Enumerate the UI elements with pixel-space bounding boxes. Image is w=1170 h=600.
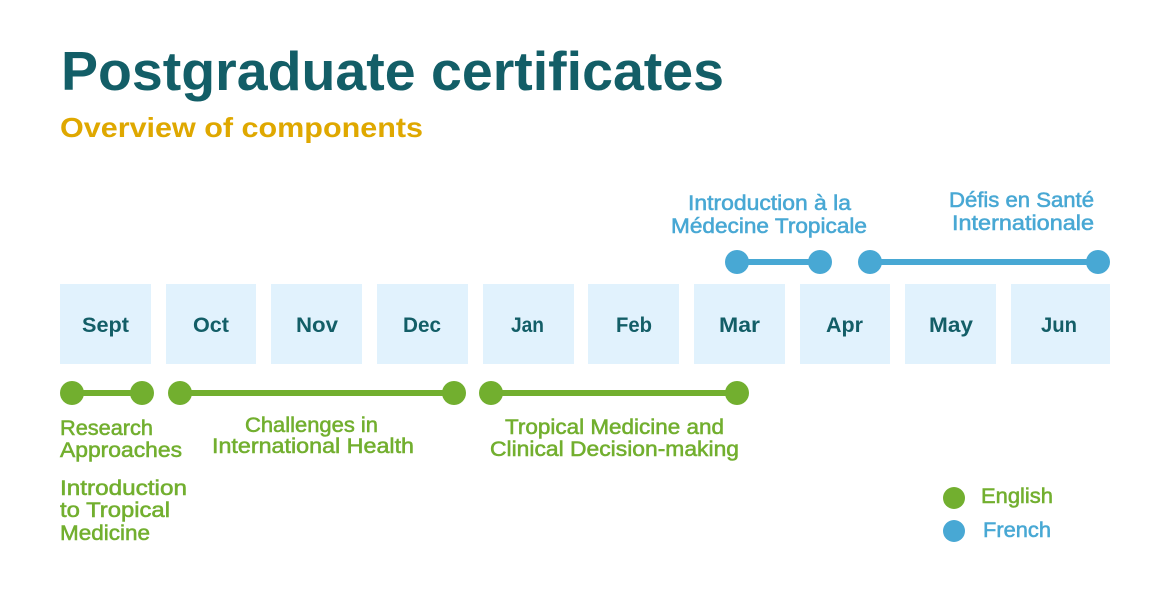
French course: Introduction à la Médecine Tropicale: Médecine Tropicale: [671, 215, 867, 238]
legend item: English: English: [981, 485, 1053, 508]
French course: Introduction à la Médecine Tropicale: Introduction à la: [688, 192, 851, 215]
English course: Challenges in International Health: [168, 381, 466, 458]
month: Dec: [377, 284, 468, 364]
month: May: [905, 284, 996, 364]
month: May: May: [929, 314, 973, 337]
month: Nov: [271, 284, 362, 364]
French course: Défis en Santé Internationale: Internationale: [952, 212, 1094, 235]
English course: Research Approaches and Introduction to Tropical Medicine: to Tropical: [60, 499, 170, 522]
month row: [60, 284, 1110, 364]
month: Mar: [694, 284, 785, 364]
month: Sept: [60, 284, 151, 364]
month: Jun: Jun: [1041, 314, 1077, 337]
English course: Challenges in International Health: Challenges in: [245, 414, 378, 437]
English course: Research Approaches and Introduction to Tropical Medicine: [60, 381, 187, 545]
month: Mar: Mar: [719, 314, 760, 337]
French course: Introduction à la Médecine Tropicale: [671, 192, 867, 274]
month: Feb: [588, 284, 679, 364]
French course: Défis en Santé Internationale: Défis en Santé: [949, 189, 1094, 212]
legend item: French: French: [983, 519, 1051, 542]
month: Oct: Oct: [193, 314, 229, 337]
English course: Research Approaches and Introduction to Tropical Medicine: Introduction: [60, 477, 187, 500]
English course: Tropical Medicine and Clinical Decision-making: Clinical Decision-making: [490, 438, 739, 461]
title: Postgraduate certificates: [61, 40, 724, 102]
English course: Challenges in International Health: International Health: [212, 435, 414, 458]
month: Jun: [1011, 284, 1110, 364]
month: Apr: [800, 284, 890, 364]
subtitle: Overview of components: [60, 112, 423, 143]
English course: Tropical Medicine and Clinical Decision-making: Tropical Medicine and: [505, 416, 724, 439]
legend: [943, 485, 1053, 542]
month: Oct: [166, 284, 256, 364]
English course: Research Approaches and Introduction to Tropical Medicine: Approaches: [60, 439, 182, 462]
month: Feb: Feb: [616, 314, 652, 337]
French course: Défis en Santé Internationale: [858, 189, 1110, 274]
month: Sept: Sept: [82, 314, 129, 337]
month: Jan: [483, 284, 574, 364]
month: Jan: Jan: [511, 314, 544, 337]
month: Dec: Dec: [403, 314, 441, 337]
English course: Research Approaches and Introduction to Tropical Medicine: Research: [60, 417, 153, 440]
month: Apr: Apr: [826, 314, 863, 337]
month: Nov: Nov: [296, 314, 338, 337]
English course: Research Approaches and Introduction to Tropical Medicine: Medicine: [60, 522, 150, 545]
English course: Tropical Medicine and Clinical Decision-making: [479, 381, 749, 461]
